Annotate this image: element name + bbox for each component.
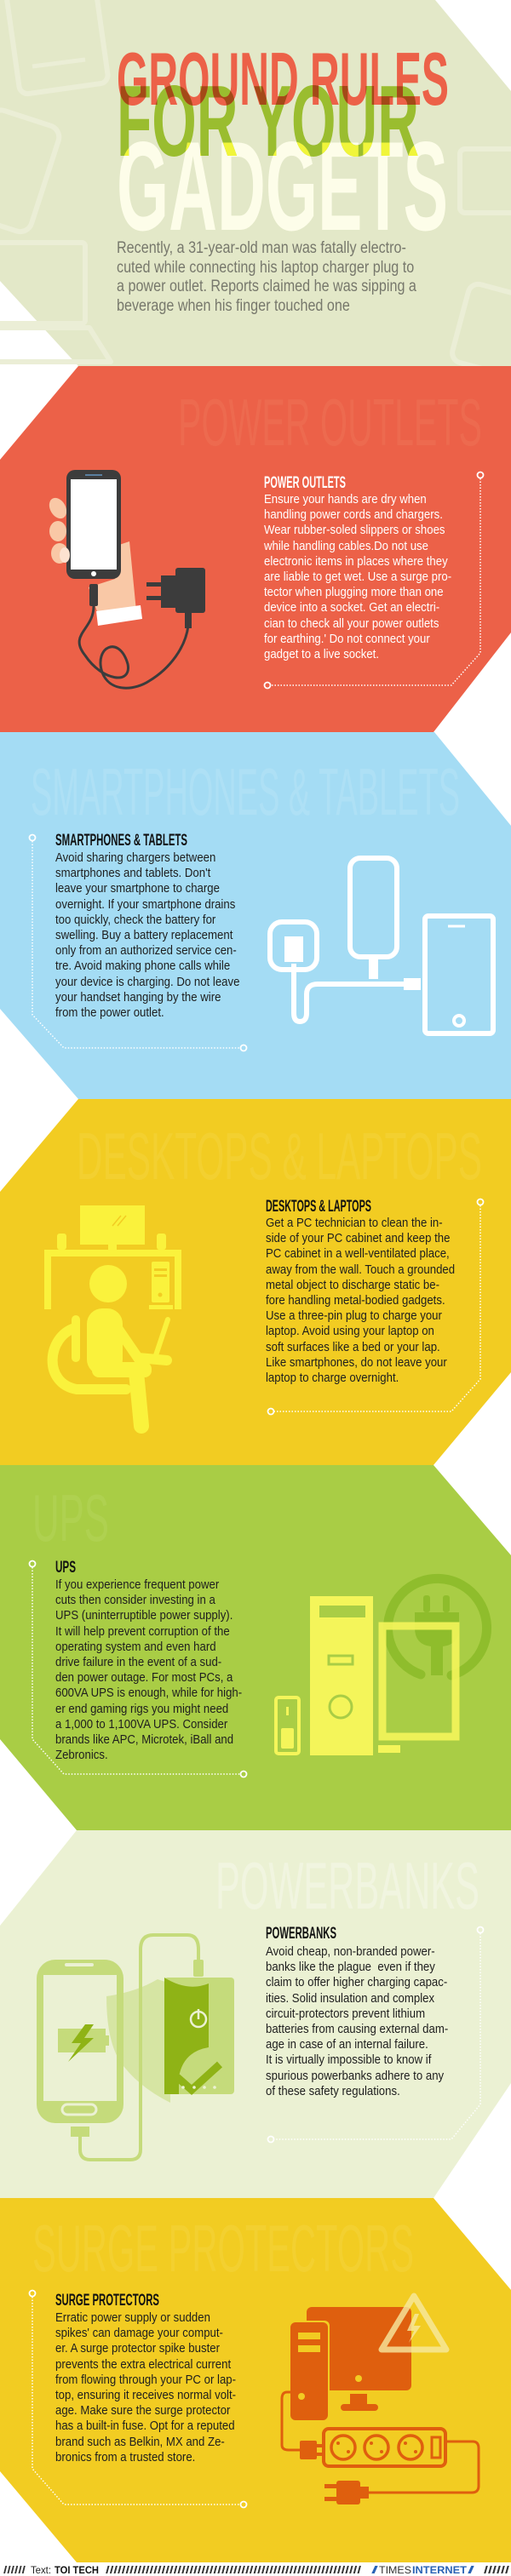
footer: credits: //////	[484, 2564, 510, 2576]
footer: credits	[3, 2564, 510, 2576]
heading: desktops & laptops: DESKTOPS & LAPTOPS	[266, 1198, 371, 1216]
icon: phone charging from powerbank	[37, 1935, 234, 2160]
icon: person at desk with laptop	[44, 1205, 181, 1426]
dotted frame	[29, 2290, 247, 2508]
icon: charger, phone and tablet	[270, 858, 493, 1033]
dotted frame	[267, 1199, 484, 1415]
footer: credits: Text:	[31, 2564, 51, 2576]
text: powerbanks body: Avoid cheap, non-branded power- banks like the plague even if they claim to offer higher charging capac- ities. Solid insulation and complex circuit-protectors prevent lithium batteries from causing external dam- age in case of an internal failure. It is virtually impossible to know if spurious powerbanks adhere to any of these safety regulations.	[266, 1944, 448, 2098]
heading: surge protectors: SURGE PROTECTORS	[55, 2292, 159, 2310]
text: desktops body: Get a PC technician to clean the in- side of your PC cabinet and keep the PC cabinet in a well-ventilated place, away from the wall. Touch a grounded metal object to discharge static be- fore handling metal-bodied gadgets. Use a three-pin plug to charge your laptop. Avoid using your laptop on soft surfaces like a bed or your lap. Like smartphones, do not leave your laptop to charge overnight.	[266, 1216, 455, 1385]
footer: credits: TIMES	[379, 2564, 411, 2576]
title	[117, 37, 449, 247]
footer: credits: TOI TECH	[55, 2564, 99, 2576]
text: surge body: Erratic power supply or sudden spikes' can damage your comput- er. A surge protector spike buster prevents the extra electrical current from flowing through your PC or lap- top, ensuring it receives normal volt- age. Make sure the surge protector has a built-in fuse. Opt for a reputed brand such as Belkin, MX and Ze- bronics from a trusted store.	[55, 2310, 236, 2464]
panel: power outlets	[49, 385, 484, 690]
panel: surge protectors	[29, 2211, 480, 2508]
dotted frame	[267, 1927, 484, 2142]
dotted frame	[29, 1561, 247, 1777]
heading: smartphones & tablets: SMARTPHONES & TABLETS	[55, 832, 187, 850]
footer: credits: ////////////////////////////////////////////////////////////////	[106, 2564, 362, 2576]
footer: credits: /	[371, 2564, 380, 2576]
icons: faint gadget outlines in header	[0, 0, 511, 366]
heading: powerbanks: POWERBANKS	[266, 1925, 336, 1943]
panel: powerbanks	[37, 1848, 484, 2161]
footer: credits: /	[468, 2564, 476, 2576]
panel: UPS	[29, 1480, 491, 1777]
panel: desktops & laptops	[44, 1119, 484, 1434]
footer: credits: INTERNET	[412, 2564, 468, 2576]
footer: credits: //////	[3, 2564, 26, 2576]
dotted frame	[29, 834, 247, 1050]
icon: hand holding phone with charger	[46, 470, 205, 688]
text: power outlets body: Ensure your hands are dry when handling power cords and chargers. Wear rubber-soled slippers or shoes while handling cables.Do not use electronic items in places where they are liable to get wet. Use a surge pro- tector when plugging more than one device into a socket. Get an electri- cian to check all your power outlets for earthing.' Do not connect your gadget to a live socket.	[264, 492, 451, 661]
panel: smartphones & tablets	[29, 754, 496, 1052]
icon: UPS, tower, monitor, plug	[276, 1578, 487, 1755]
dotted frame	[264, 472, 484, 688]
ghost title: UPS	[32, 1480, 109, 1555]
icon: computer, power strip and warning	[282, 2296, 479, 2504]
heading: UPS: UPS	[55, 1559, 76, 1577]
text: smartphones body: Avoid sharing chargers between smartphones and tablets. Don't leave your smartphone to charge overnight. If your smartphone drains too quickly, check the battery for swelling. Buy a battery replacement only from an authorized service cen- tre. Avoid making phone calls while your device is charging. Do not leave your handset hanging by the wire from the power outlet.	[55, 850, 239, 1020]
heading: power outlets: POWER OUTLETS	[264, 474, 346, 492]
intro text: Recently, a 31-year-old man was fatally electro- cuted while connecting his laptop charger plug to a power outlet. Reports claimed he was sipping a beverage when his finger touched one	[117, 239, 416, 315]
text: UPS body: If you experience frequent power cuts then consider investing in a UPS (uninterruptible power supply). It will help prevent corruption of the operating system and even hard drive failure in the event of a sud- den power outage. For most PCs, a 600VA UPS is enough, while for high- er end gaming rigs you might need a 1,000 to 1,100VA UPS. Consider brands like APC, Microtek, iBall and Zebronics.	[55, 1577, 242, 1762]
